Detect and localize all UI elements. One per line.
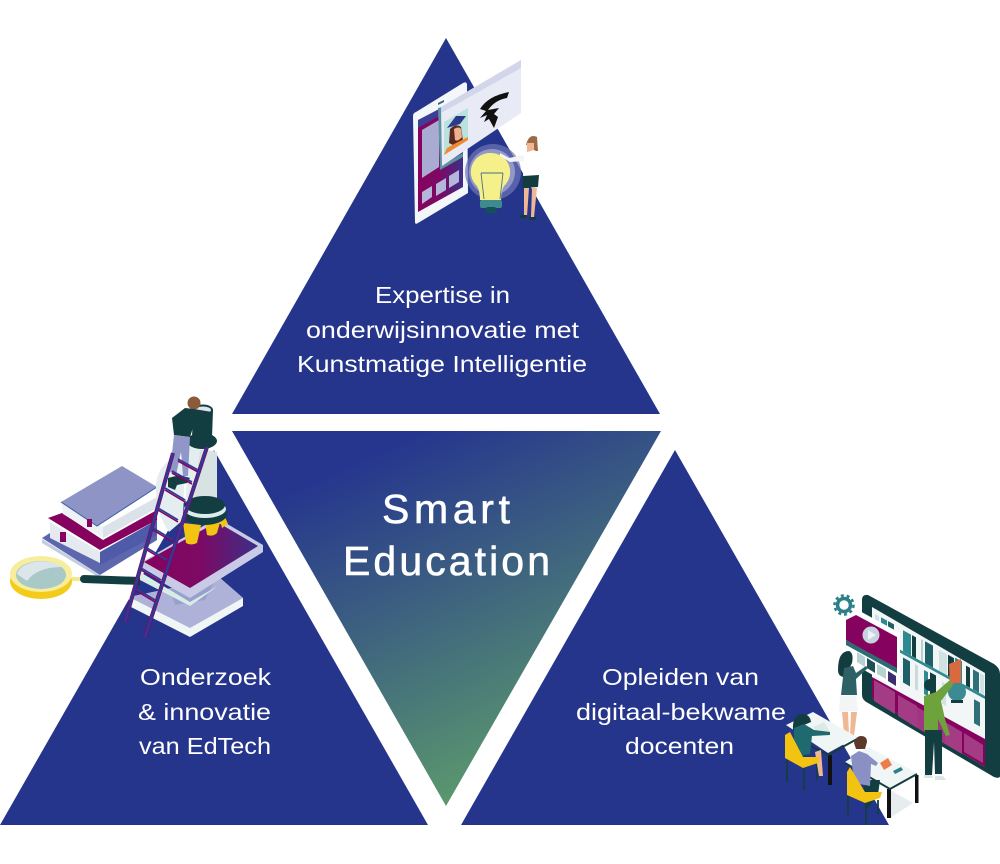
icon: desk back [845,736,918,825]
text: opleiden [576,664,786,759]
text: expertise: Kunstmatige Intelligentie [297,351,587,377]
text: onderzoek [138,664,271,759]
icon: microscope [129,404,263,637]
text: opleiden: docenten [625,733,734,759]
text: expertise: onderwijsinnovatie met [306,317,580,343]
icon: wifi mark [480,92,509,128]
icon: lightbulb [465,144,521,213]
text: opleiden: Opleiden van [602,664,759,690]
icon: shelf row two [903,658,980,727]
icon: ladder [125,447,207,637]
illustration: tablet, lightbulb and woman [413,60,541,224]
icon: man reaching for book [924,659,966,780]
heading: smart education: Smart [382,486,511,532]
panel: left triangle [0,450,428,825]
panel: centre triangle [232,431,661,806]
icon: video panel [846,609,900,690]
text: expertise: Expertise in [375,282,510,308]
text: onderzoek: van EdTech [139,733,271,759]
icon: person [168,396,212,490]
icon: magnifier [10,556,140,599]
text: onderzoek: Onderzoek [140,664,271,690]
heading: smart education [343,486,550,584]
icon: bookcase screen [862,595,1000,778]
panel: right triangle [461,450,889,825]
text: expertise [297,282,587,377]
icon: browser window [441,60,521,166]
icon: gear [834,596,854,614]
icon: shelf row one [873,613,985,699]
illustration: microscope, books and magnifier [10,396,263,637]
icon: books [42,466,157,578]
panel: top triangle [232,38,660,414]
illustration: classroom with bookcase screen [785,595,1000,825]
icon: woman [500,136,541,220]
heading: smart education: Education [343,538,550,584]
text: opleiden: digitaal-bekwame [576,699,786,725]
icon: woman at panel [838,651,868,736]
icon: desk front [785,712,857,790]
text: onderzoek: & innovatie [138,699,271,725]
icon: tablet [413,82,468,224]
